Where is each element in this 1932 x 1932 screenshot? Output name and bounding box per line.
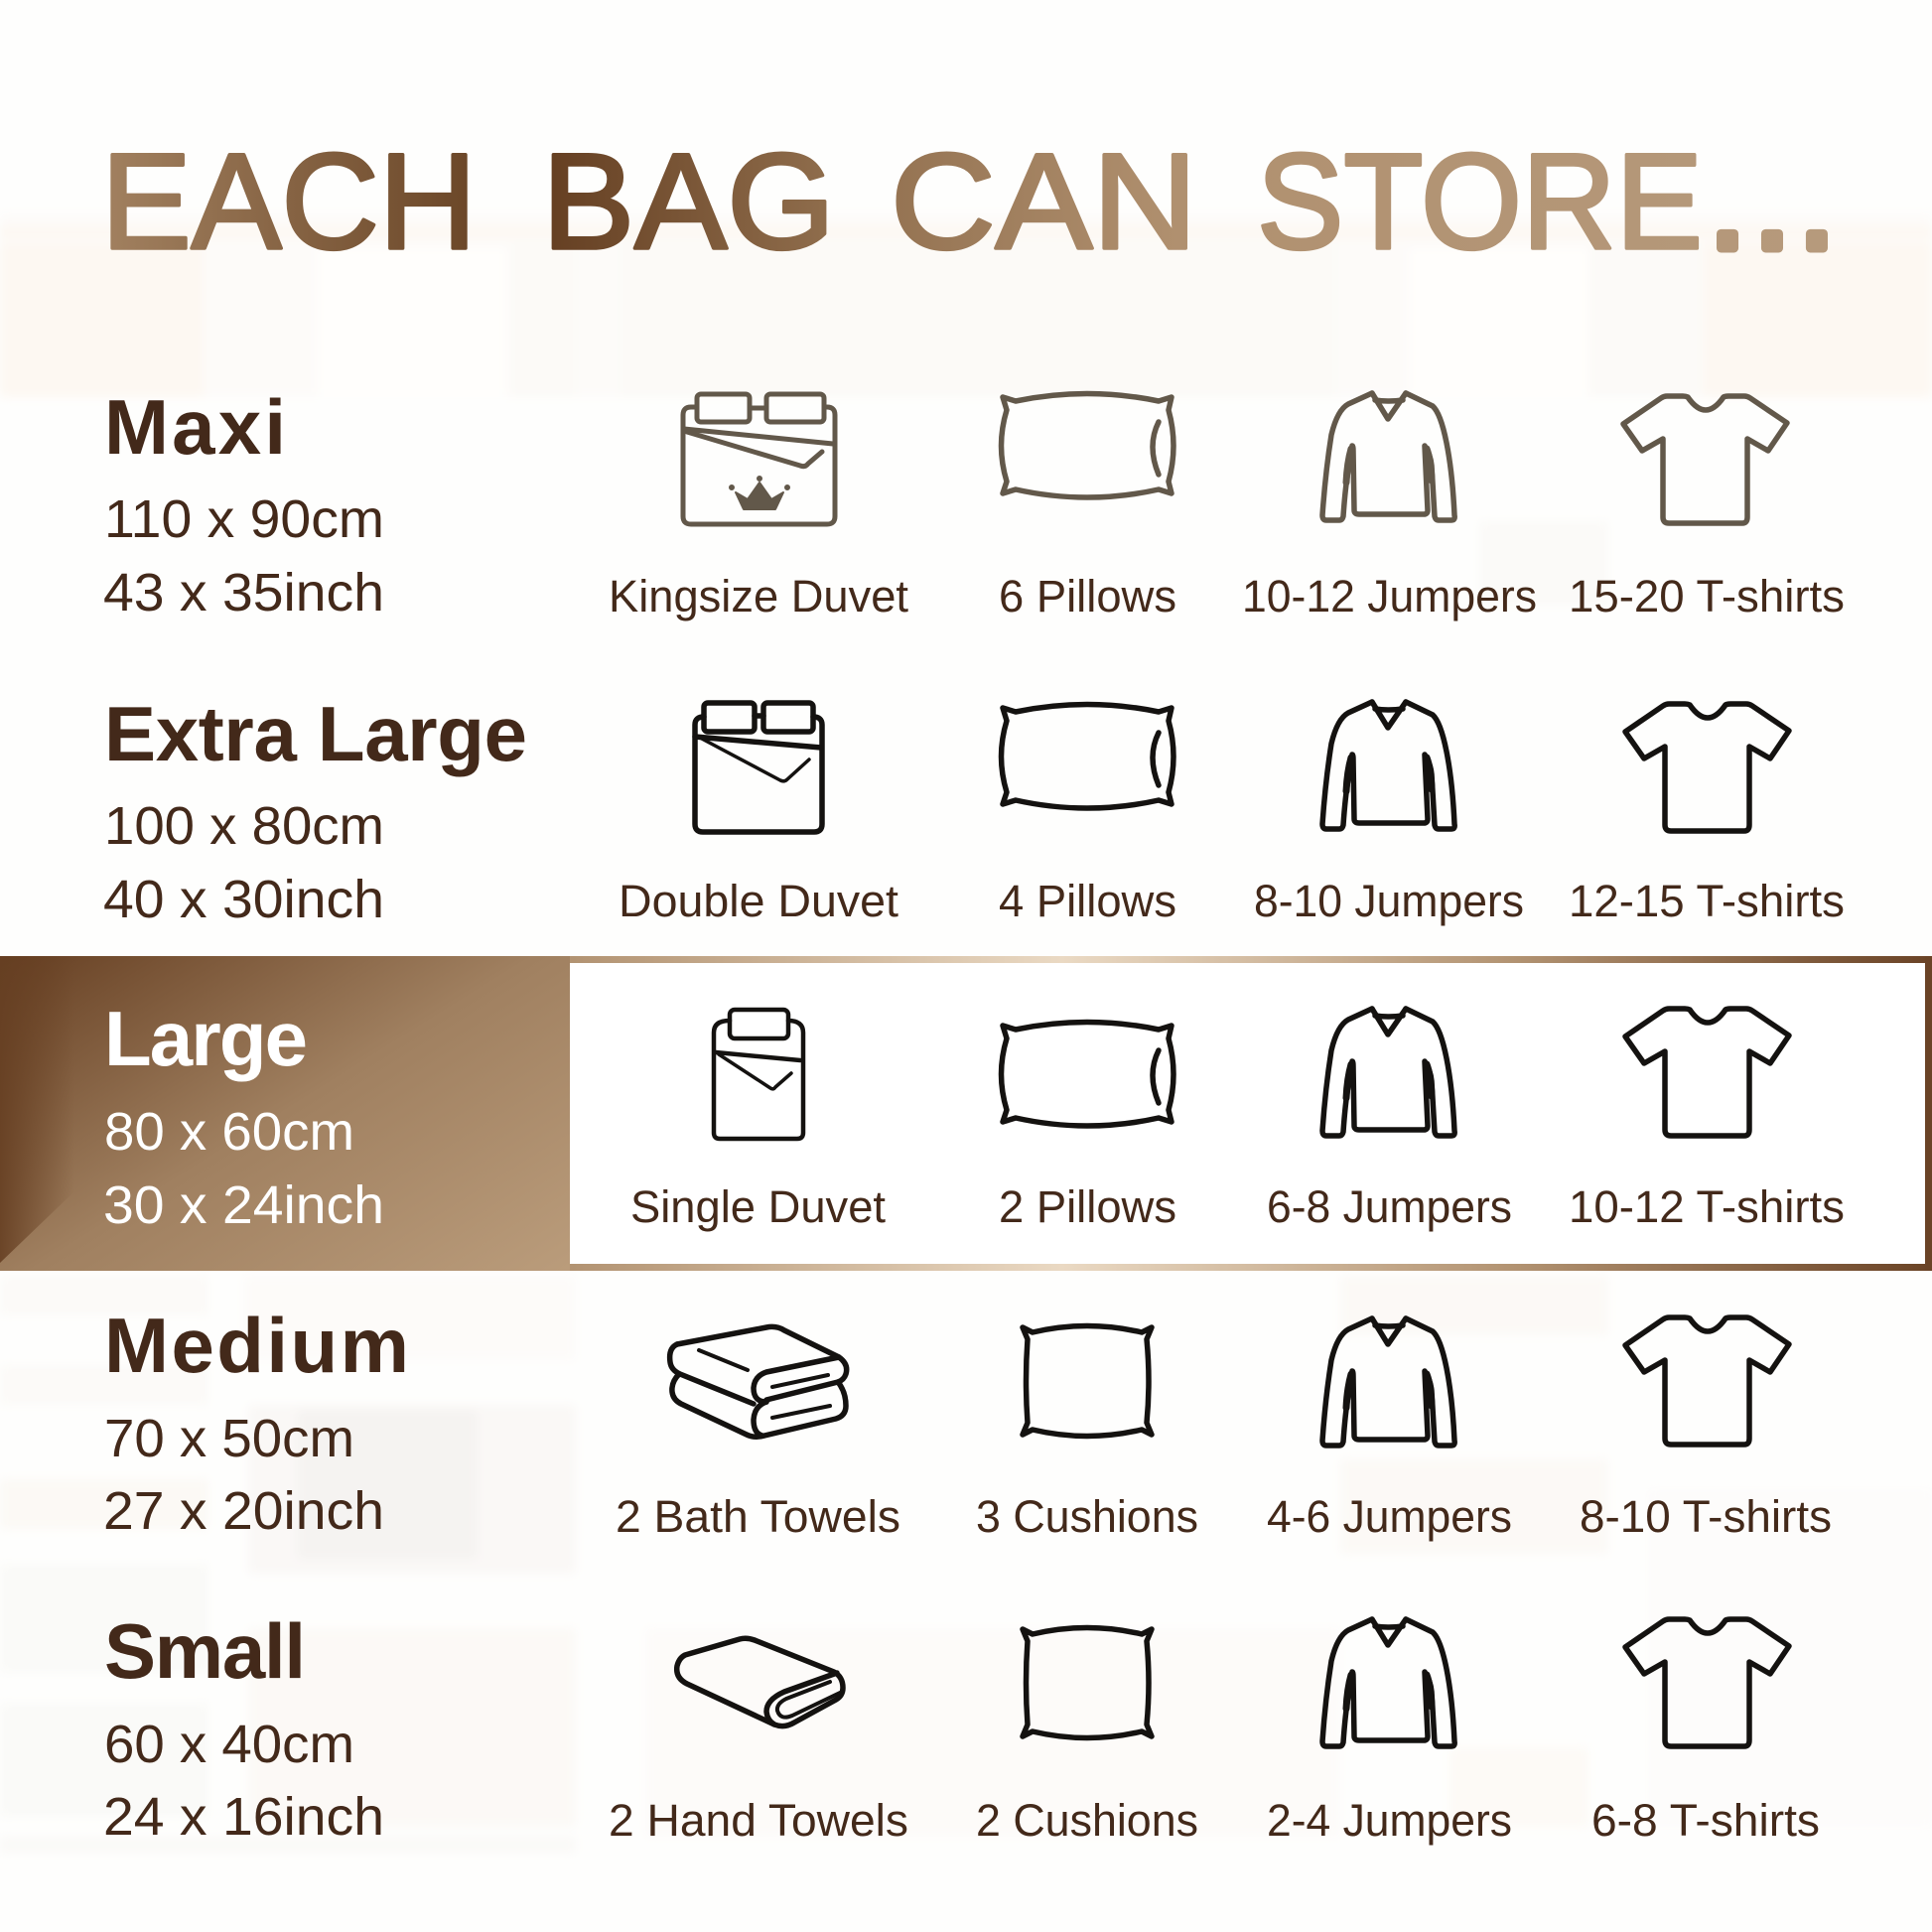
size name: Maxi (104, 383, 286, 471)
inch dimensions: 27 x 20inch (103, 1481, 384, 1541)
label: jumpers: 10-12 Jumpers (1242, 571, 1537, 621)
inch dimensions: 40 x 30inch (103, 870, 384, 929)
panel: Large row highlight band (0, 956, 1932, 1271)
icon: stacked bath towels (670, 1326, 847, 1437)
title (101, 126, 1836, 278)
size name: Extra Large (104, 690, 527, 777)
label: t-shirts: 12-15 T-shirts (1569, 876, 1845, 926)
size name: Large (104, 995, 308, 1082)
label: pillows: 2 Pillows (999, 1181, 1176, 1232)
label: t-shirts: 8-10 T-shirts (1580, 1491, 1832, 1542)
row: Large (103, 995, 1845, 1235)
inch dimensions: 30 x 24inch (103, 1175, 384, 1235)
icon: t-shirt (1625, 1009, 1789, 1136)
label: pillows: 6 Pillows (999, 571, 1176, 621)
icon: jumper (1322, 1318, 1454, 1446)
label: jumpers: 4-6 Jumpers (1267, 1491, 1512, 1542)
icon: single duvet (714, 1010, 803, 1139)
label: t-shirts: 15-20 T-shirts (1569, 571, 1845, 621)
title: STORE (1257, 126, 1703, 278)
label: pillows: 4 Pillows (999, 876, 1176, 926)
icon: kingsize duvet (683, 394, 835, 524)
centimetre dimensions: 100 x 80cm (104, 796, 384, 856)
centimetre dimensions: 60 x 40cm (104, 1715, 354, 1774)
label: t-shirts: 10-12 T-shirts (1569, 1181, 1845, 1232)
row: Small (103, 1607, 1820, 1847)
icon: pillow (1001, 393, 1173, 497)
row: Extra Large (103, 690, 1845, 929)
label: single duvet: Single Duvet (630, 1181, 886, 1232)
centimetre dimensions: 110 x 90cm (104, 489, 384, 549)
row: Maxi (103, 383, 1845, 622)
icon: cushion (1023, 1628, 1152, 1737)
icon: jumper (1322, 702, 1454, 829)
title: BAG (542, 126, 835, 278)
title: ... (1709, 126, 1836, 278)
label: jumpers: 8-10 Jumpers (1254, 876, 1524, 926)
inch dimensions: 43 x 35inch (103, 563, 384, 622)
label: jumpers: 6-8 Jumpers (1267, 1181, 1512, 1232)
title: EACH (101, 126, 477, 278)
icon: jumper (1322, 1619, 1454, 1746)
icon: pillow (1001, 1023, 1173, 1126)
icon: t-shirt (1625, 704, 1789, 831)
icon: pillow (1001, 705, 1173, 808)
inch dimensions: 24 x 16inch (103, 1787, 384, 1847)
icon: double duvet (695, 703, 822, 832)
label: kingsize duvet: Kingsize Duvet (609, 571, 908, 621)
icon: t-shirt (1623, 396, 1787, 523)
icon: t-shirt (1625, 1619, 1789, 1746)
icon: cushion (1023, 1326, 1152, 1436)
icon: folded hand towel (677, 1638, 843, 1726)
title: CAN (891, 126, 1197, 278)
row: Medium (103, 1302, 1832, 1542)
label: bath towels: 2 Bath Towels (616, 1491, 900, 1542)
icon: jumper (1322, 393, 1454, 520)
label: double duvet: Double Duvet (619, 876, 899, 926)
icon: t-shirt (1625, 1317, 1789, 1445)
label: cushions: 3 Cushions (976, 1491, 1198, 1542)
label: t-shirts: 6-8 T-shirts (1591, 1795, 1820, 1846)
centimetre dimensions: 70 x 50cm (104, 1409, 354, 1468)
size name: Small (104, 1607, 306, 1695)
label: hand towels: 2 Hand Towels (609, 1795, 908, 1846)
label: jumpers: 2-4 Jumpers (1267, 1795, 1512, 1846)
label: cushions: 2 Cushions (976, 1795, 1198, 1846)
icon: jumper (1322, 1009, 1454, 1136)
size name: Medium (104, 1302, 409, 1389)
centimetre dimensions: 80 x 60cm (104, 1102, 354, 1162)
